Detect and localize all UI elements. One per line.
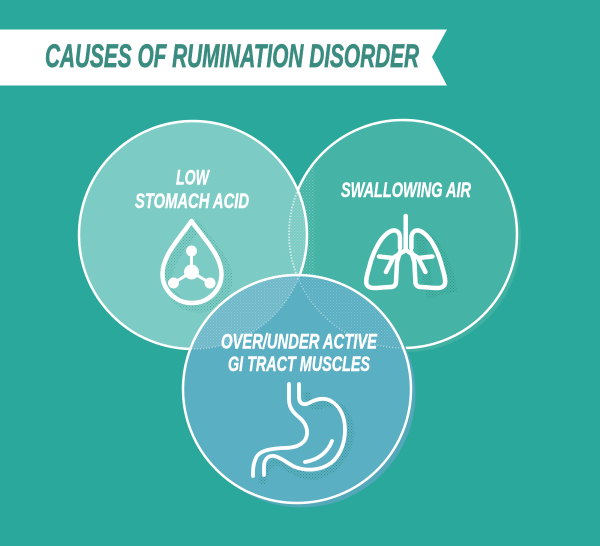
circle: low stomach acid (78, 120, 314, 350)
circle: over/under active GI tract muscles (182, 274, 416, 508)
icon: stomach (253, 384, 345, 476)
title banner (0, 30, 447, 86)
label: swallowing air: SWALLOWING AIR (341, 179, 472, 202)
icon: acid drop (162, 221, 222, 303)
label: over/under active GI tract muscles: OVER/UNDER ACTIVE (221, 330, 378, 354)
label: low stomach acid: STOMACH ACID (135, 190, 249, 213)
label: over/under active GI tract muscles: GI TRACT MUSCLES (228, 353, 370, 376)
icon: acid drop shadow (168, 226, 228, 308)
circle: swallowing air (289, 120, 521, 352)
label: low stomach acid: LOW (176, 166, 210, 190)
icon: lungs (366, 216, 445, 288)
icon: stomach shadow (262, 392, 351, 484)
label: low stomach acid (135, 166, 249, 213)
label: over/under active GI tract muscles (221, 330, 378, 376)
icon: lungs shadow (420, 235, 452, 293)
